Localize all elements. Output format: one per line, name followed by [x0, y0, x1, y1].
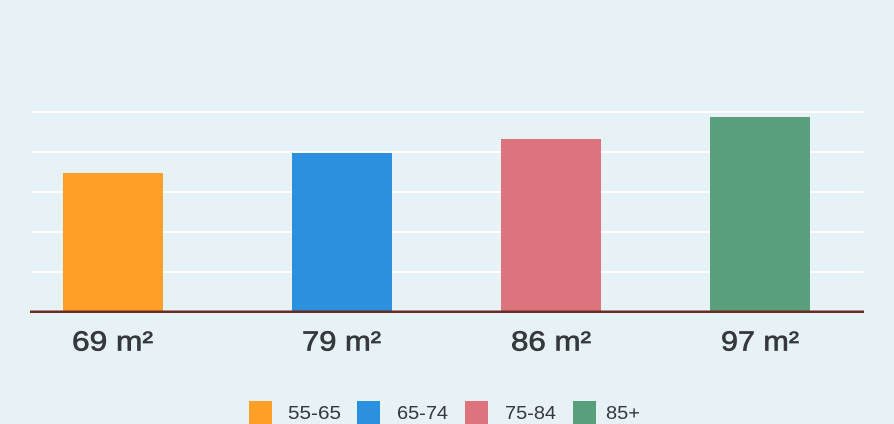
bar: 85+ [710, 117, 810, 311]
legend swatch: 75-84 [465, 401, 488, 424]
legend [249, 401, 640, 424]
legend label: 65-74: 65-74 [397, 403, 448, 423]
legend swatch: 55-65 [249, 401, 272, 424]
value label: 86 m²: 86 m² [511, 326, 591, 356]
legend label: 85+: 85+ [606, 403, 640, 423]
bar: 55-65 [63, 173, 163, 311]
value label: 79 m²: 79 m² [302, 326, 381, 356]
legend swatch: 65-74 [357, 401, 380, 424]
legend swatch: 85+ [573, 401, 596, 424]
value label: 97 m²: 97 m² [721, 326, 799, 356]
bar: 75-84 [501, 139, 601, 311]
value label: 69 m²: 69 m² [72, 326, 153, 356]
legend label: 55-65: 55-65 [288, 403, 341, 423]
legend label: 75-84: 75-84 [505, 403, 556, 423]
bar: 65-74 [292, 153, 392, 311]
axis baseline [30, 310, 864, 313]
